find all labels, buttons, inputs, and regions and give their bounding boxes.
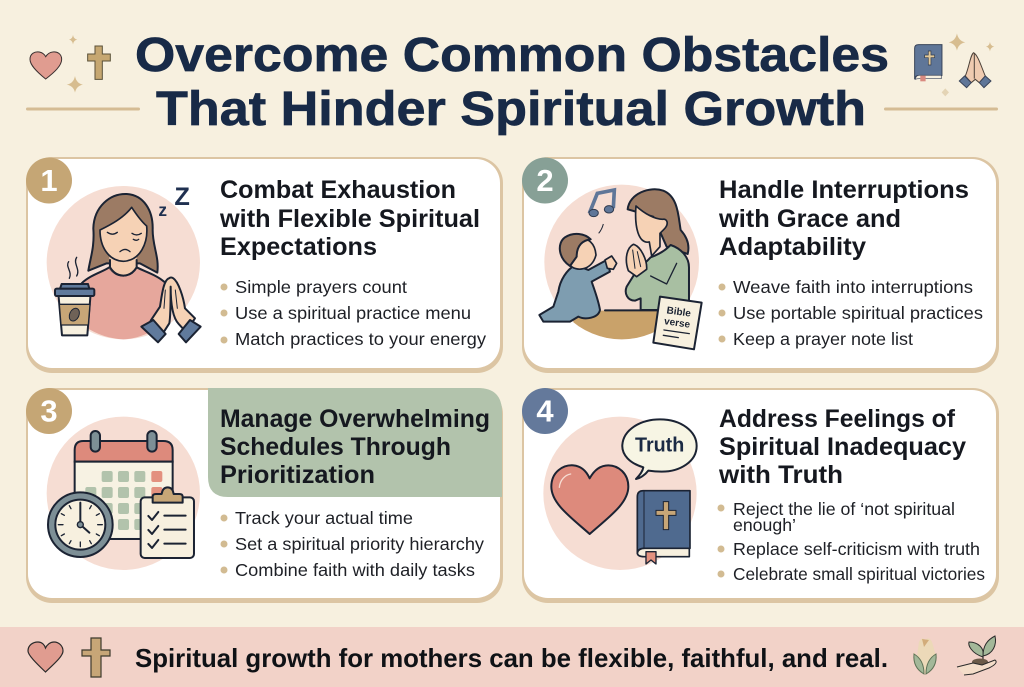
illustration: tired mother with coffee and praying hands: z <box>158 200 167 220</box>
heading 1: with Flexible Spiritual <box>219 205 480 233</box>
heading 2: Handle Interruptions <box>719 176 969 204</box>
title: That Hinder Spiritual Growth <box>156 83 866 136</box>
illustration: calendar, clock and checklist <box>47 417 200 570</box>
heading 3: Manage Overwhelming <box>220 405 490 433</box>
title <box>135 29 889 136</box>
bullet list 4: enough’ <box>733 515 796 535</box>
heading 3: Prioritization <box>220 461 375 489</box>
bullet list 1: Use a spiritual practice menu <box>235 303 471 323</box>
heading 3: Schedules Through <box>220 433 451 461</box>
bullet list 3: Set a spiritual priority hierarchy <box>235 534 484 554</box>
bullet list 3: Track your actual time <box>235 508 413 528</box>
card 2 background <box>522 157 999 373</box>
card 4 background <box>522 388 999 603</box>
number badge 3 <box>26 388 72 434</box>
number badge 4 <box>522 388 568 434</box>
illustration: mother praying with baby and bible verse <box>539 185 702 349</box>
heading 4: with Truth <box>718 461 843 489</box>
footer left icons <box>28 638 110 677</box>
bullet list 2: Keep a prayer note list <box>733 329 913 349</box>
bullet list 4: Celebrate small spiritual victories <box>733 564 985 584</box>
number badge 4: 4 <box>536 394 554 428</box>
bullet list 3: Combine faith with daily tasks <box>235 560 475 580</box>
footer banner <box>0 627 1024 687</box>
illustration: heart, truth bubble and bible <box>543 417 697 570</box>
bullet list 3 <box>220 508 484 580</box>
header right icons <box>915 33 994 96</box>
number badge 2: 2 <box>536 163 554 198</box>
heading 3 <box>220 405 490 489</box>
bullet list 2: Weave faith into interruptions <box>733 277 973 297</box>
header divider right <box>884 108 998 110</box>
footer message: Spiritual growth for mothers can be flexible, faithful, and real. <box>135 643 888 673</box>
illustration: mother praying with baby and bible verse: Bible <box>666 305 692 320</box>
bullet list 1: Match practices to your energy <box>235 329 486 349</box>
panel 1: exhaustion <box>26 157 503 373</box>
illustration: mother praying with baby and bible verse: verse <box>663 316 691 331</box>
number badge 3: 3 <box>40 394 58 428</box>
card 1 background <box>26 157 503 373</box>
heading 1 <box>219 176 480 261</box>
heading 2: with Grace and <box>718 205 901 233</box>
number badge 2 <box>522 158 568 204</box>
panel 4: inadequacy <box>522 388 999 603</box>
bullet list 2: Use portable spiritual practices <box>733 303 983 323</box>
bullet list 4: Replace self-criticism with truth <box>733 539 980 559</box>
heading 2 <box>718 176 969 261</box>
heading 2: Adaptability <box>719 233 866 261</box>
bullet list 4: Reject the lie of ‘not spiritual <box>733 499 955 519</box>
green heading band <box>208 388 502 497</box>
heading 1: Expectations <box>220 233 377 261</box>
header divider left <box>26 108 140 110</box>
panel 3: schedules <box>26 388 503 603</box>
bullet list 2 <box>718 277 983 349</box>
heading 1: Combat Exhaustion <box>220 176 456 204</box>
bullet list 4 <box>718 499 985 584</box>
title: Overcome Common Obstacles <box>135 29 889 82</box>
bullet list 1: Simple prayers count <box>235 277 407 297</box>
illustration: heart, truth bubble and bible: Truth <box>635 434 684 456</box>
illustration: tired mother with coffee and praying hands: Z <box>174 183 190 211</box>
heading 4: Address Feelings of <box>719 405 956 433</box>
heading 4 <box>718 405 966 489</box>
bullet list 1 <box>220 277 486 349</box>
header left icons <box>30 35 110 93</box>
panel 2: interruptions <box>522 157 999 373</box>
heading 4: Spiritual Inadequacy <box>719 433 966 461</box>
card 3 background <box>26 388 503 603</box>
number badge 1: 1 <box>40 163 58 198</box>
footer right icons <box>914 636 996 675</box>
number badge 1 <box>26 158 72 204</box>
illustration: tired mother with coffee and praying hands <box>47 183 201 342</box>
